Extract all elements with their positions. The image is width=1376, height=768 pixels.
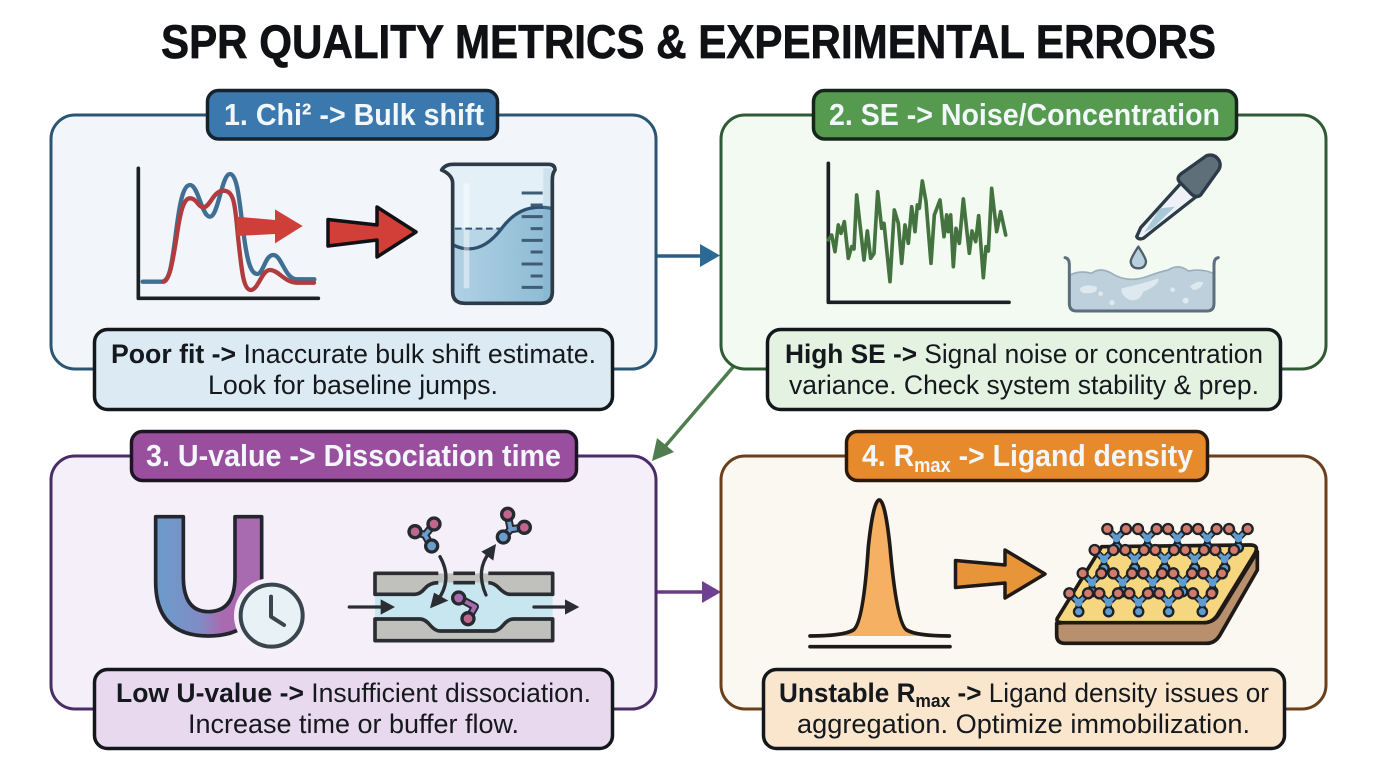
caption box 1 [94, 330, 612, 410]
caption box 4: Ligand density issues or [989, 678, 1279, 708]
icon: dropper and sample dish [1065, 155, 1220, 311]
icon: beaker with water [442, 164, 555, 303]
panel 2 background [721, 115, 1326, 369]
icon: ligand lattice on sensor chip [1057, 524, 1257, 643]
arrow: panel 1 to panel 2 [656, 244, 720, 267]
panel 3 heading: 3. U-value -> Dissociation time [146, 438, 561, 473]
panel 2 heading [814, 90, 1236, 139]
caption box 4 [764, 670, 1284, 748]
panel 1 heading [208, 90, 498, 139]
panel: Chi2 bulk shift [51, 90, 656, 410]
arrow: panel 2 to panel 3 [652, 366, 734, 461]
caption box 2 [768, 330, 1280, 410]
panel 1 background [51, 115, 656, 369]
panel 4 heading: 4. R [862, 438, 919, 473]
icon: flow channel with molecules [349, 508, 579, 641]
chart: Rmax peak [810, 500, 950, 647]
icon: U shape with clock [156, 517, 309, 653]
arrow: panel 3 to panel 4 [656, 581, 721, 603]
ligand units [1064, 524, 1253, 616]
caption box 4: Unstable R [779, 678, 915, 708]
caption box 3: Low U-value -> Insufficient dissociation. [116, 678, 591, 708]
molecules [409, 508, 530, 625]
flow arrows [349, 544, 579, 615]
panel 4 heading [846, 432, 1208, 480]
title: SPR QUALITY METRICS & EXPERIMENTAL ERRORS [161, 15, 1216, 68]
panel 1 heading: 1. Chi² -> Bulk shift [224, 97, 484, 132]
caption box 3: Increase time or buffer flow. [188, 709, 519, 739]
panel 2 heading: 2. SE -> Noise/Concentration [829, 97, 1220, 132]
panel: Rmax ligand density [721, 432, 1326, 748]
chart: shifted sensorgram curves [138, 168, 318, 298]
panel 4 heading: -> Ligand density [951, 438, 1194, 473]
panel 4 heading: max [914, 455, 951, 477]
arrow: peak to surface [956, 550, 1045, 598]
caption box 2: variance. Check system stability & prep. [789, 370, 1259, 400]
panel: SE noise and concentration [721, 90, 1326, 410]
caption box 4: -> [950, 678, 982, 708]
panel: U-value dissociation time [51, 432, 656, 748]
caption box 4: aggregation. Optimize immobilization. [797, 709, 1250, 739]
caption box 3 [94, 670, 612, 748]
icon: shift arrow [237, 209, 303, 243]
panel 3 background [51, 456, 656, 709]
arrow: chart to beaker [328, 207, 416, 257]
caption box 1: Look for baseline jumps. [208, 370, 498, 400]
chart: noisy signal [828, 163, 1009, 302]
panel 4 background [721, 456, 1326, 709]
panel 3 heading [132, 432, 576, 480]
caption box 2: High SE -> Signal noise or concentration [785, 339, 1263, 369]
caption box 1: Poor fit -> Inaccurate bulk shift estimate. [111, 339, 596, 369]
caption box 4: max [915, 691, 950, 711]
